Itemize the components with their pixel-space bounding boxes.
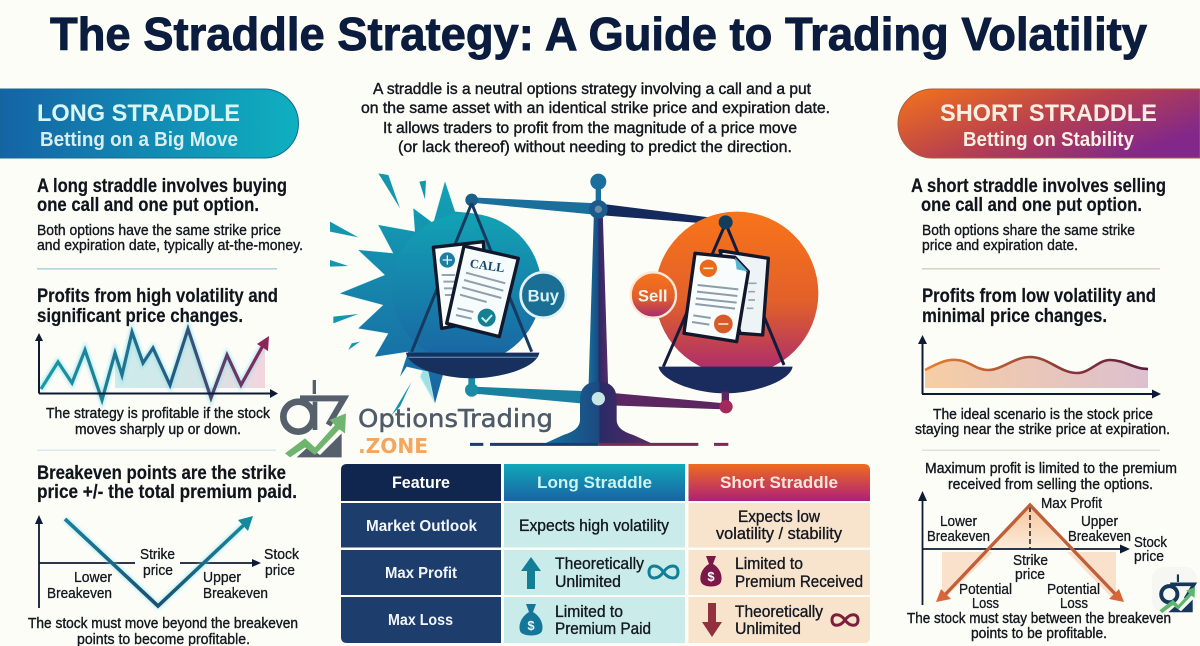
short straddle definition: one call and one put option. — [921, 195, 1142, 216]
short straddle volatility heading: Profits from low volatility and — [922, 286, 1156, 307]
panel: long straddle — [0, 89, 303, 646]
row: max profit: Unlimited — [555, 573, 621, 591]
row: market outlook — [341, 503, 870, 548]
logo wordmark: OptionsTrading — [358, 404, 553, 433]
chart: short straddle payoff: Breakeven — [927, 529, 990, 545]
long straddle banner: Betting on a Big Move — [40, 129, 238, 151]
short straddle definition: A short straddle involves selling — [911, 176, 1166, 197]
long straddle banner: LONG STRADDLE — [37, 100, 240, 127]
payoff caption: The stock must move beyond the breakeven — [28, 615, 298, 632]
short straddle volatility heading: minimal price changes. — [922, 306, 1107, 327]
row: market outlook: Market Outlook — [366, 518, 477, 535]
chart caption: The ideal scenario is the stock price — [933, 406, 1153, 423]
intro text block — [361, 81, 830, 156]
long straddle volatility heading: significant price changes. — [37, 306, 243, 327]
row: market outlook: Expects high volatility — [519, 517, 670, 535]
table column headers: Short Straddle — [720, 473, 838, 492]
row: max loss — [341, 597, 870, 643]
put and call documents: CALL — [469, 256, 506, 275]
left side burst and circle — [330, 173, 542, 415]
row: max loss: Limited to — [555, 603, 623, 621]
row: max profit: Premium Received — [735, 573, 863, 591]
icon: teal money bag — [519, 604, 543, 636]
chart caption — [46, 405, 270, 438]
intro text block: A straddle is a neutral options strategy involving a call and a put — [373, 81, 812, 98]
short straddle banner: SHORT STRADDLE — [940, 100, 1157, 127]
icon: infinity — [649, 566, 678, 578]
small corner logo — [1152, 567, 1197, 613]
chart: short straddle payoff — [918, 491, 1168, 612]
chart: short straddle payoff: Stock — [1134, 535, 1168, 551]
max profit statement: Maximum profit is limited to the premium — [925, 460, 1177, 477]
icon: money bag — [700, 556, 722, 586]
chart caption — [915, 406, 1170, 438]
chart: short straddle payoff: Breakeven — [1068, 529, 1131, 545]
chart: short straddle payoff: Potential — [1047, 582, 1100, 598]
row: market outlook: volatility / stability — [716, 525, 843, 543]
scale post and beams — [465, 174, 728, 444]
breakeven heading: price +/- the total premium paid. — [37, 482, 297, 503]
put and call documents — [433, 242, 518, 337]
logo zone suffix: .ZONE — [358, 434, 428, 458]
row: max profit — [341, 550, 870, 595]
sell documents — [684, 251, 768, 342]
icon: teal money bag: $ — [527, 618, 535, 633]
long straddle definition — [37, 176, 303, 254]
chart caption: The strategy is profitable if the stock — [46, 405, 270, 422]
short straddle banner: Betting on Stability — [963, 129, 1135, 151]
short straddle volatility heading — [922, 286, 1156, 327]
chart: short straddle payoff: Lower — [940, 514, 977, 530]
chart: long straddle payoff V: Breakeven — [203, 586, 268, 602]
payoff caption — [28, 615, 298, 646]
buy badge — [521, 272, 566, 318]
chart: long straddle payoff V: Breakeven — [47, 586, 112, 602]
chart: short straddle payoff: price — [1015, 567, 1045, 583]
intro text block: on the same asset with an identical strike price and expiration date. — [361, 100, 830, 117]
long straddle definition: A long straddle involves buying — [37, 176, 287, 197]
logo mark — [283, 380, 346, 457]
row: max profit: Theoretically — [555, 555, 645, 573]
chart: long straddle payoff V: price — [265, 563, 295, 579]
intro text block: (or lack thereof) without needing to predict the direction. — [398, 139, 792, 156]
table column headers: Feature — [392, 473, 450, 492]
title: The Straddle Strategy: A Guide to Trading Volatility — [50, 8, 1147, 60]
row: market outlook: Expects low — [738, 508, 820, 526]
chart: long straddle payoff V: Strike — [140, 547, 175, 563]
icon: up arrow — [521, 557, 541, 589]
row: max loss: Unlimited — [735, 620, 801, 638]
payoff caption: The stock must stay between the breakeven — [907, 610, 1171, 627]
balance scale illustration — [330, 173, 818, 444]
comparison table — [341, 464, 870, 643]
long straddle volatility heading — [37, 286, 278, 327]
row: max loss: Premium Paid — [555, 620, 651, 638]
right pan with chains — [658, 215, 793, 413]
short straddle definition: Both options share the same strike — [922, 222, 1135, 239]
row: max profit: Max Profit — [385, 565, 457, 582]
max profit statement — [925, 460, 1177, 493]
chart: high volatility price line — [35, 329, 278, 400]
left pan with chains — [406, 203, 539, 378]
chart: long straddle payoff V — [35, 515, 300, 608]
row: max loss: Max Loss — [388, 612, 453, 629]
chart: long straddle payoff V: Upper — [203, 570, 241, 586]
row: max loss: Theoretically — [735, 603, 824, 621]
table column headers — [341, 464, 870, 501]
long straddle volatility heading: Profits from high volatility and — [37, 286, 278, 307]
long straddle definition: one call and one put option. — [37, 195, 259, 216]
icon: down arrow — [702, 603, 722, 637]
payoff caption — [907, 610, 1171, 642]
chart: short straddle payoff: price — [1134, 549, 1164, 565]
row: max profit: Limited to — [735, 555, 803, 573]
chart caption: moves sharply up or down. — [75, 421, 241, 438]
sell badge — [631, 272, 676, 318]
chart: long straddle payoff V: Stock — [264, 547, 300, 563]
payoff caption: points to be profitable. — [971, 625, 1107, 642]
breakeven heading: Breakeven points are the strike — [37, 463, 286, 484]
max profit statement: received from selling the options. — [948, 476, 1153, 493]
buy badge: Buy — [528, 286, 560, 305]
chart: short straddle payoff: Strike — [1013, 553, 1048, 569]
chart caption: staying near the strike price at expiration. — [915, 421, 1170, 438]
long straddle definition: Both options have the same strike price — [37, 222, 281, 239]
chart: short straddle payoff: Potential — [959, 582, 1012, 598]
watermark logo: OptionsTrading.Zone — [283, 380, 553, 458]
chart: long straddle payoff V: Lower — [74, 570, 112, 586]
breakeven heading — [37, 463, 297, 503]
long straddle banner — [0, 89, 298, 158]
chart: short straddle payoff: Upper — [1081, 514, 1118, 530]
chart: long straddle payoff V: price — [143, 563, 173, 579]
icon: money bag: $ — [707, 569, 715, 584]
chart: short straddle payoff: Loss — [1060, 596, 1088, 612]
chart: low volatility wave — [918, 335, 1161, 398]
chart: short straddle payoff: Loss — [972, 596, 999, 612]
table column headers: Long Straddle — [537, 473, 652, 492]
short straddle definition — [911, 176, 1166, 254]
panel: short straddle — [898, 89, 1200, 642]
short straddle definition: price and expiration date. — [922, 237, 1078, 254]
sell badge: Sell — [638, 286, 667, 305]
right side circle — [655, 212, 818, 375]
short straddle banner — [898, 89, 1200, 158]
intro text block: It allows traders to profit from the magnitude of a price move — [383, 120, 797, 137]
icon: maroon infinity — [832, 615, 858, 625]
long straddle definition: and expiration date, typically at-the-money. — [37, 237, 303, 254]
chart: short straddle payoff: Max Profit — [1041, 496, 1102, 512]
